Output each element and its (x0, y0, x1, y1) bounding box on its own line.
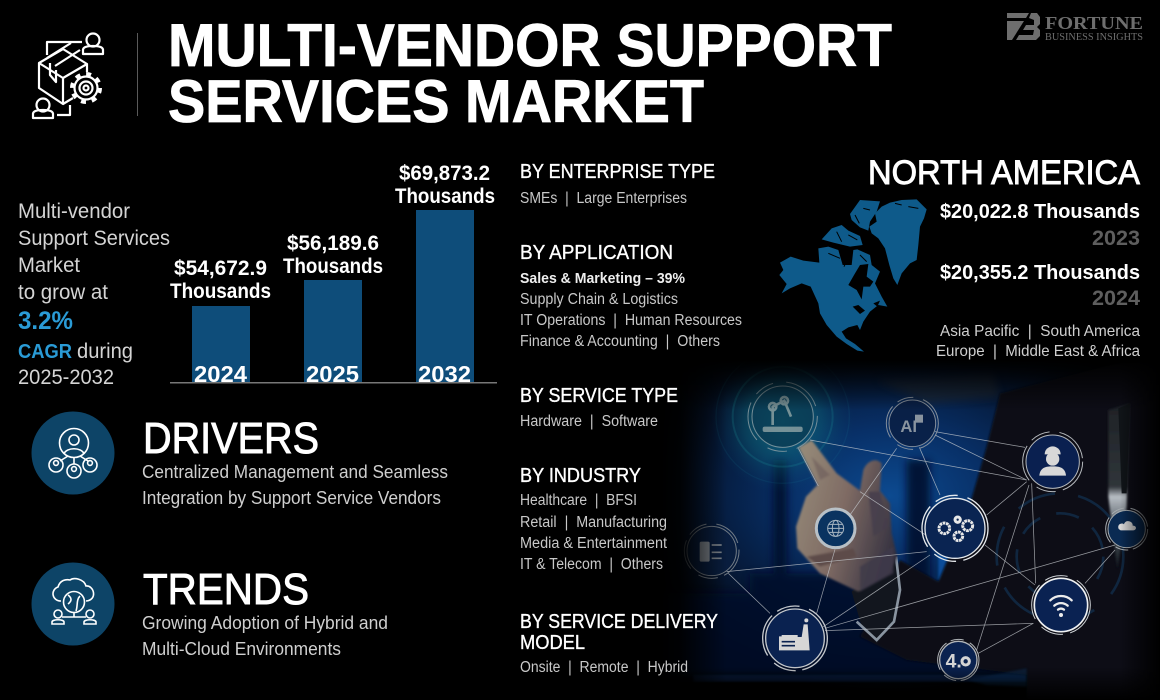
title: MULTI-VENDOR SUPPORT (168, 12, 892, 79)
drivers text: DRIVERS (143, 414, 319, 463)
text block: CAGR statement: Multi-vendor (18, 200, 130, 223)
suit (860, 380, 1145, 688)
title (168, 12, 892, 135)
text block: CAGR statement: during (77, 340, 133, 363)
text block: CAGR statement: 3.2% (18, 307, 73, 335)
bar chart (170, 162, 497, 387)
segment: by application: Sales & Marketing – 39% (520, 271, 685, 287)
node: cloud (1106, 508, 1148, 550)
text block: CAGR statement: to grow at (18, 281, 108, 304)
years: 2032 (418, 361, 471, 387)
value labels: Thousands (395, 185, 495, 208)
trends text: Growing Adoption of Hybrid and (142, 613, 388, 633)
segment: by application: IT Operations | Human Resources (520, 312, 742, 329)
text block: CAGR statement: 2025-2032 (18, 366, 114, 389)
header divider (137, 33, 138, 116)
segment: by service type: Hardware | Software (520, 413, 658, 430)
segment: by industry: IT & Telecom | Others (520, 556, 663, 573)
drivers text: Integration by Support Service Vendors (142, 488, 441, 508)
segment: by application: BY APPLICATION (520, 242, 673, 264)
logo: Fortune Business Insights: BUSINESS INSIGHTS (1045, 32, 1143, 43)
trends text (142, 565, 388, 659)
segment: by enterprise type: SMEs | Large Enterprises (520, 190, 687, 207)
segment: by service type: BY SERVICE TYPE (520, 385, 678, 407)
node: AI (886, 397, 938, 449)
segment: by enterprise type (520, 161, 715, 207)
trends text: TRENDS (143, 565, 309, 614)
region values (940, 201, 1140, 310)
segment: by industry: Healthcare | BFSI (520, 492, 637, 509)
node: 4.0 (938, 639, 979, 681)
segment: by enterprise type: BY ENTERPRISE TYPE (520, 161, 715, 183)
segment: by application: Finance & Accounting | Others (520, 333, 720, 350)
icon: drivers (32, 412, 114, 494)
region values: $20,355.2 Thousands (940, 262, 1140, 284)
value labels: Thousands (283, 255, 383, 278)
segment: by industry (520, 465, 668, 573)
value labels (170, 162, 495, 303)
bar 2032 (416, 210, 474, 382)
value labels: $56,189.6 (287, 232, 379, 255)
icon: trends (32, 562, 114, 646)
segment: by service delivery model (520, 611, 718, 676)
logo: Fortune Business Insights (1007, 13, 1143, 43)
segment: by application (520, 242, 742, 350)
segment: by service type (520, 385, 678, 430)
photo: businessman touching industrial network (684, 366, 1148, 688)
cuff (852, 557, 901, 643)
node: wifi (1032, 576, 1090, 634)
years: 2025 (306, 361, 359, 387)
drivers text: Centralized Management and Seamless (142, 462, 448, 482)
node: 4.0: 4. (946, 651, 962, 672)
node: robot arm (748, 382, 817, 451)
drivers text (142, 414, 448, 508)
node: gears (922, 495, 988, 561)
other regions: Europe | Middle East & Africa (936, 343, 1140, 360)
text block: CAGR statement (18, 200, 170, 389)
trends text: Multi-Cloud Environments (142, 639, 341, 659)
text block: CAGR statement: CAGR (18, 341, 73, 363)
segment: by service delivery model: MODEL (520, 632, 585, 654)
hand (796, 440, 897, 592)
other regions: Asia Pacific | South America (940, 323, 1140, 340)
node: globe (816, 509, 855, 548)
segment: by application: Supply Chain & Logistics (520, 291, 678, 308)
node: AI: AI (900, 417, 917, 436)
bar 2024 (192, 306, 250, 382)
text block: CAGR statement: Support Services (18, 227, 170, 250)
segment: by service delivery model: Onsite | Remote | Hybrid (520, 659, 688, 676)
value labels: $54,672.9 (174, 257, 267, 280)
network lines (727, 432, 1115, 653)
title: SERVICES MARKET (168, 68, 704, 135)
other regions (936, 323, 1140, 360)
node: factory (763, 606, 827, 671)
segment: by industry: Retail | Manufacturing (520, 514, 667, 531)
value labels: $69,873.2 (399, 162, 490, 185)
region values: 2024 (1092, 287, 1140, 310)
region heading: North America: NORTH AMERICA (868, 154, 1140, 192)
bar 2025 (304, 280, 362, 382)
node: worker (1023, 432, 1083, 492)
icon: box, gear and users (33, 34, 103, 118)
text block: CAGR statement: Market (18, 254, 80, 277)
years (194, 361, 471, 387)
region values: 2023 (1092, 227, 1140, 250)
map: North America (779, 199, 927, 352)
logo: Fortune Business Insights: FORTUNE (1045, 13, 1143, 33)
segment: by industry: BY INDUSTRY (520, 465, 641, 487)
segment: by service delivery model: BY SERVICE DELIVERY (520, 611, 718, 633)
years: 2024 (194, 361, 247, 387)
segment: by industry: Media & Entertainment (520, 535, 668, 552)
region values: $20,022.8 Thousands (940, 201, 1140, 223)
node: server (684, 524, 739, 578)
value labels: Thousands (170, 280, 271, 303)
